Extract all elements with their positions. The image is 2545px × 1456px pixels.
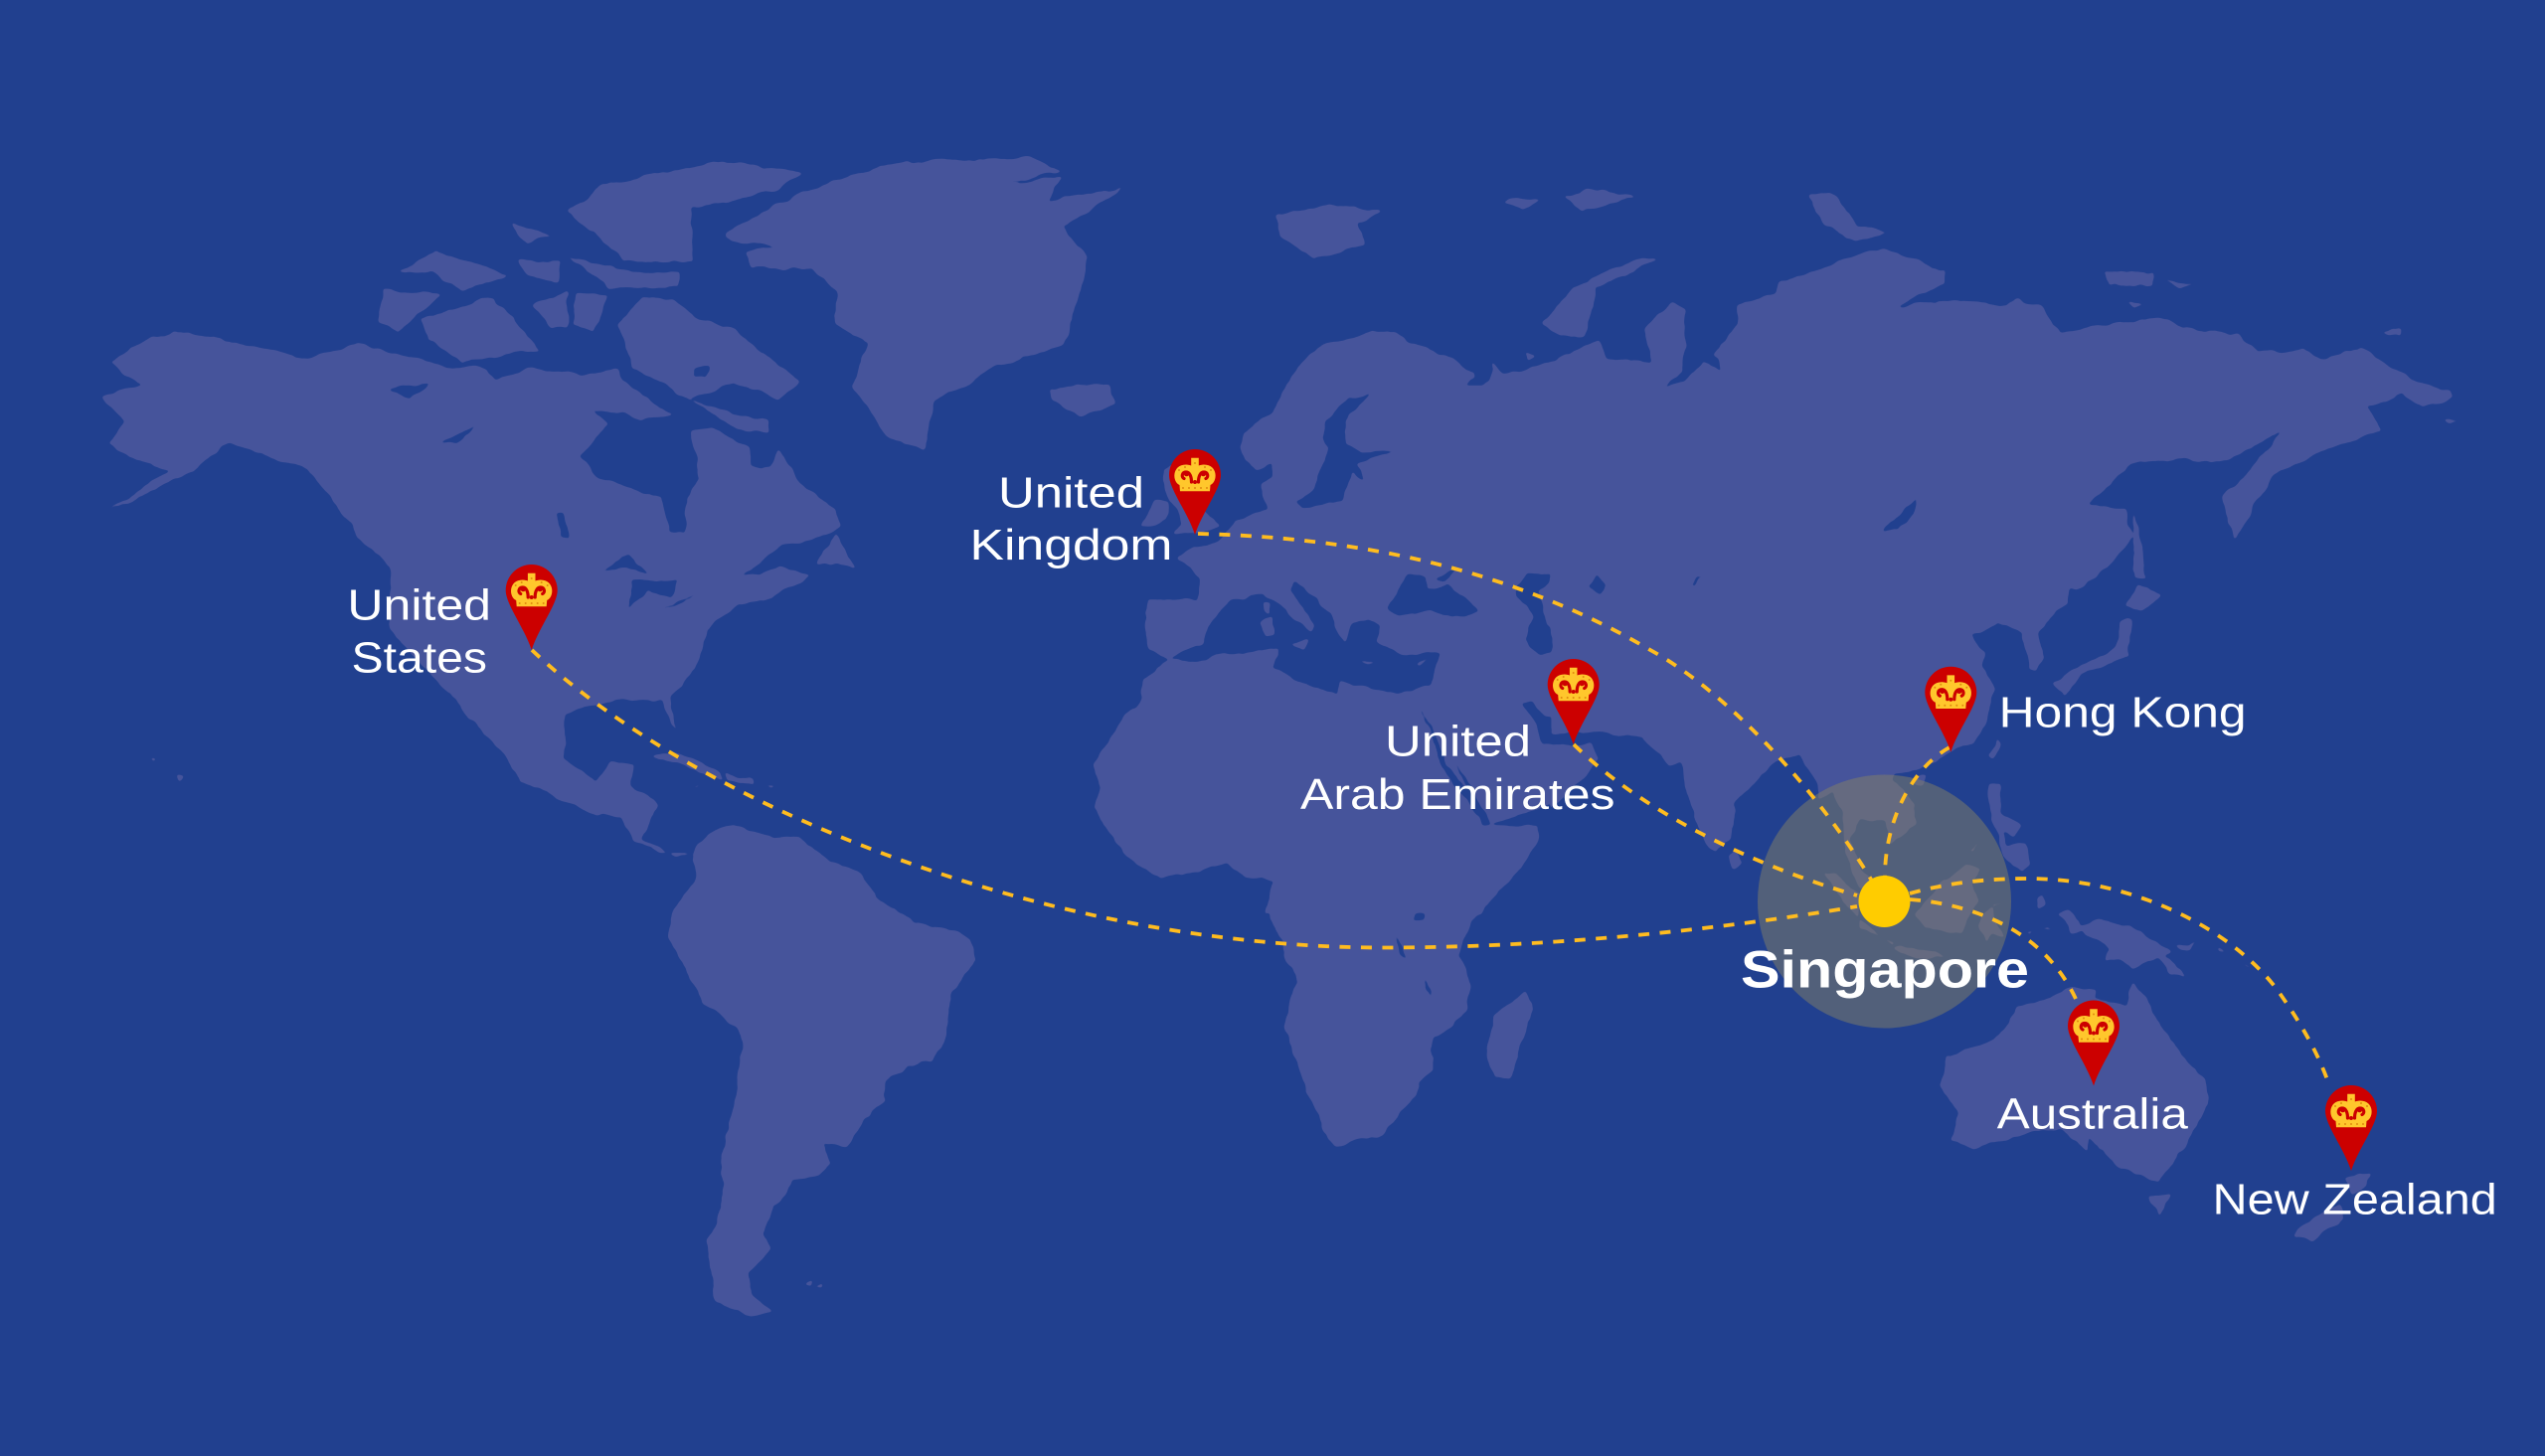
Singapore marker dot — [1859, 876, 1911, 927]
line: United States to Singapore — [532, 650, 1857, 948]
pin: Hong Kong — [1925, 667, 1976, 752]
label: United Kingdom: United — [998, 469, 1144, 518]
line: New Zealand to Singapore — [1910, 879, 2329, 1085]
Southeast Asian islands and New Guinea — [1892, 785, 2260, 977]
Baltic Sea — [1295, 395, 1399, 509]
Red Sea and Persian Gulf — [1417, 701, 1574, 823]
label: United Arab Emirates: United — [1385, 718, 1531, 766]
Central America, Caribbean, South America and southern Africa — [596, 751, 1538, 1317]
label: New Zealand: New Zealand — [2213, 1175, 2497, 1223]
line: United Arab Emirates to Singapore — [1574, 744, 1857, 895]
pin: United Arab Emirates — [1548, 659, 1600, 744]
pin: United States — [506, 565, 558, 650]
Europe — [1130, 298, 1601, 716]
Black Sea — [1387, 573, 1478, 618]
Greenland — [727, 157, 1124, 452]
Africa north and Arabia — [1096, 648, 1599, 914]
Madagascar — [1487, 991, 1534, 1077]
label: United States: States — [352, 634, 487, 683]
label: United Arab Emirates — [1300, 718, 1614, 819]
Iceland — [1051, 386, 1115, 417]
line: Hong Kong to Singapore — [1885, 747, 1950, 877]
label: United States — [347, 581, 491, 683]
Singapore highlight circle — [1758, 775, 2011, 1028]
label: Australia: Australia — [1997, 1090, 2188, 1139]
label: United Kingdom — [970, 469, 1173, 569]
pin: Australia — [2068, 1000, 2120, 1085]
Arabia east tip — [1551, 748, 1596, 812]
South and East Asia — [1551, 557, 2068, 946]
Australia and New Zealand — [1941, 980, 2372, 1241]
North America and Arctic islands — [101, 157, 1124, 815]
label: Hong Kong: Hong Kong — [1999, 689, 2247, 737]
pin: United Kingdom — [1169, 449, 1221, 535]
label: United Arab Emirates: Arab Emirates — [1300, 770, 1614, 819]
Caspian Sea — [1518, 573, 1559, 653]
Africa south — [1193, 814, 1538, 1146]
label: United States: United — [347, 581, 491, 630]
line: United Kingdom to Singapore — [1198, 534, 1873, 883]
South America — [669, 824, 977, 1317]
label: Singapore: Singapore — [1741, 941, 2029, 1000]
North American lakes — [390, 368, 710, 753]
pin: New Zealand — [2325, 1085, 2377, 1171]
line: Australia to Singapore — [1910, 899, 2076, 999]
dashed connection lines — [532, 534, 2329, 1085]
label: United Kingdom: Kingdom — [970, 521, 1173, 569]
Mediterranean Sea — [1170, 581, 1440, 696]
Eurasia north — [1272, 190, 2461, 696]
